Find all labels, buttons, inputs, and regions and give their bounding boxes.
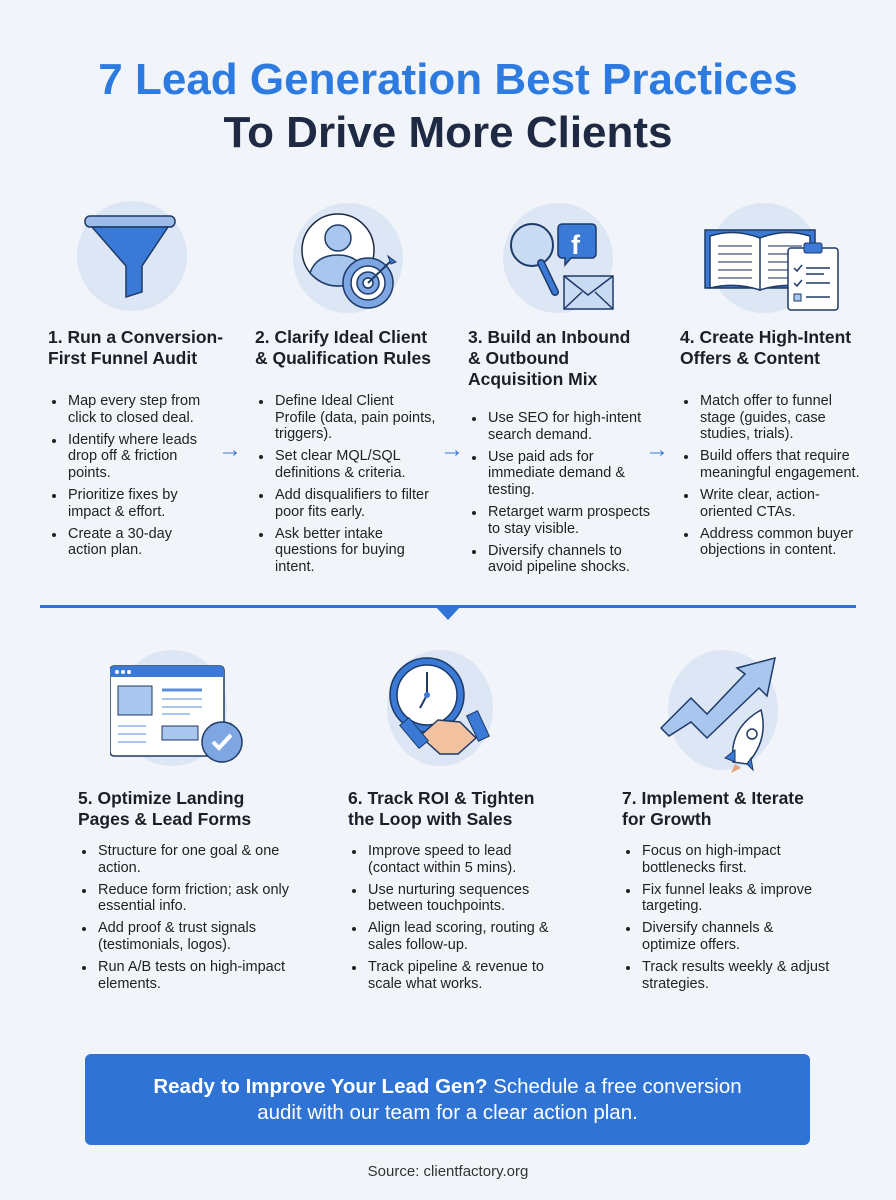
column 1: Map every step from [68,393,200,409]
column 7: Focus on high-impact [642,843,781,859]
icon: growth arrow rocket [660,650,778,773]
title [98,55,798,157]
column 5 [78,788,289,992]
icon: book & checklist [704,203,839,313]
icon: search, social, email [503,203,614,313]
CTA banner [85,1054,810,1145]
column 7: bottlenecks first. [642,860,747,876]
icon: funnel [77,201,187,311]
column 4: objections in content. [700,542,836,558]
column 6 [348,788,549,992]
column 3: Use paid ads for [488,449,594,465]
column 1 [48,327,223,558]
column 7: Diversify channels & [642,920,773,936]
column 3: to stay visible. [488,521,579,537]
column 1: Prioritize fixes by [68,487,178,503]
column 2: Set clear MQL/SQL [275,448,401,464]
column 1: action plan. [68,542,142,558]
column 5: Pages & Lead Forms [78,809,251,829]
column 2: triggers). [275,426,332,442]
column 7 [622,788,830,992]
column 2: Add disqualifiers to filter [275,487,429,503]
column 1: Create a 30-day [68,526,172,542]
column 1: impact & effort. [68,504,165,520]
column 5: action. [98,860,141,876]
column 1: points. [68,465,111,481]
column 4: Address common buyer [700,526,853,542]
column 6: (contact within 5 mins). [368,860,516,876]
icon: landing page [110,650,243,766]
title: To Drive More Clients [223,108,673,157]
column 5: elements. [98,976,161,992]
column 5: Add proof & trust signals [98,920,256,936]
column 3: search demand. [488,427,592,443]
column 2: & Qualification Rules [255,348,431,368]
column 3: avoid pipeline shocks. [488,559,630,575]
column 6: Align lead scoring, routing & [368,920,549,936]
divider with pointer [40,605,856,620]
column 7: Track results weekly & adjust [642,959,829,975]
column 2: 2. Clarify Ideal Client [255,327,427,347]
CTA banner: audit with our team for a clear action plan. [257,1101,638,1124]
column 6: 6. Track ROI & Tighten [348,788,534,808]
icon: search, social, email: f [571,230,581,260]
column 4: oriented CTAs. [700,504,796,520]
column 3: immediate demand & [488,465,625,481]
arrow 3: → [645,436,669,463]
column 1: click to closed deal. [68,410,194,426]
column 4: Write clear, action- [700,487,820,503]
column 3 [468,327,650,575]
column 5: (testimonials, logos). [98,937,231,953]
column 1: drop off & friction [68,448,177,464]
column 4: meaningful engagement. [700,465,860,481]
column 6: Use nurturing sequences [368,882,529,898]
column 2: questions for buying [275,542,405,558]
column 2 [255,327,435,575]
column 4: Offers & Content [680,348,820,368]
column 1: Identify where leads [68,432,197,448]
arrow 1: → [218,436,242,463]
column 3: Diversify channels to [488,543,622,559]
icon: clock handshake [387,650,493,766]
column 2: Profile (data, pain points, [275,410,435,426]
column 5: essential info. [98,898,187,914]
column 6: Improve speed to lead [368,843,511,859]
arrow 2: → [440,436,464,463]
column 5: 5. Optimize Landing [78,788,244,808]
column 2: intent. [275,559,314,575]
column 3: testing. [488,482,535,498]
source: Source: clientfactory.org [368,1163,528,1180]
column 3: 3. Build an Inbound [468,327,630,347]
column 3: Retarget warm prospects [488,504,650,520]
column 4 [680,327,860,558]
icon: ideal client target [293,203,403,313]
CTA banner: Ready to Improve Your Lead Gen? Schedule a free conversion [153,1075,742,1098]
column 3: & Outbound [468,348,569,368]
column 1: First Funnel Audit [48,348,197,368]
column 7: optimize offers. [642,937,740,953]
column 6: the Loop with Sales [348,809,512,829]
column 1: 1. Run a Conversion- [48,327,223,347]
column 5: Structure for one goal & one [98,843,279,859]
column 6: between touchpoints. [368,898,505,914]
column 4: studies, trials). [700,426,793,442]
column 6: Track pipeline & revenue to [368,959,544,975]
column 6: scale what works. [368,976,482,992]
column 3: Acquisition Mix [468,369,597,389]
column 4: stage (guides, case [700,410,826,426]
title: 7 Lead Generation Best Practices [98,55,798,104]
column 6: sales follow-up. [368,937,468,953]
column 4: 4. Create High-Intent [680,327,851,347]
column 7: targeting. [642,898,702,914]
column 4: Match offer to funnel [700,393,832,409]
column 4: Build offers that require [700,448,850,464]
column 7: strategies. [642,976,709,992]
column 3: Use SEO for high-intent [488,410,641,426]
column 2: Define Ideal Client [275,393,394,409]
column 2: definitions & criteria. [275,465,406,481]
column 2: Ask better intake [275,526,383,542]
column 7: for Growth [622,809,711,829]
column 5: Run A/B tests on high-impact [98,959,285,975]
column 5: Reduce form friction; ask only [98,882,289,898]
column 7: Fix funnel leaks & improve [642,882,812,898]
column 2: poor fits early. [275,504,365,520]
column 7: 7. Implement & Iterate [622,788,804,808]
